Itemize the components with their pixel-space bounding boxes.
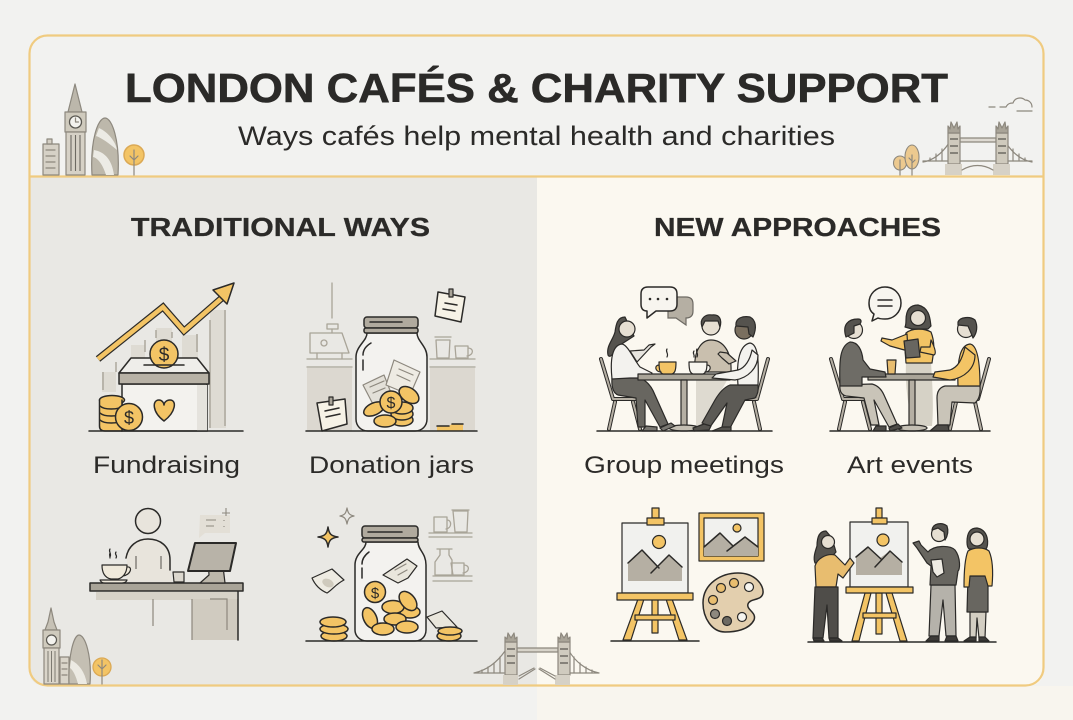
icon: fundraising box with rising arrow: $ [124, 408, 134, 428]
left chair [831, 359, 870, 429]
title: LONDON CAFÉS & CHARITY SUPPORT [125, 65, 948, 111]
label: fundraising: Fundraising [93, 452, 240, 479]
standing woman [906, 362, 933, 426]
icon: person at cafe desk [90, 508, 243, 640]
speech bubble [869, 287, 901, 321]
left man [840, 384, 897, 427]
heading: traditional ways: TRADITIONAL WAYS [131, 212, 430, 242]
right woman [967, 528, 988, 549]
back person [695, 340, 731, 372]
table and cups [638, 374, 730, 380]
icon: people viewing art on an easel [808, 508, 996, 642]
table and cup [868, 374, 955, 380]
left woman [814, 531, 836, 563]
right chair [729, 359, 768, 429]
left chair [601, 359, 640, 429]
right man [937, 386, 980, 425]
subtitle: Ways cafés help mental health and charities [238, 121, 835, 151]
middle man [929, 585, 956, 636]
icon: donation jar with coins and notes: $ [371, 585, 380, 602]
label: art events: Art events [847, 452, 973, 479]
icon: fundraising box with rising arrow: $ [159, 345, 170, 366]
icon: donation jar on cafe counter: $ [387, 395, 396, 412]
icon: bottom-left London skyline [43, 608, 111, 684]
icon: donation jar on cafe counter [306, 283, 477, 431]
icon: fundraising box with rising arrow [89, 283, 243, 431]
panel: new approaches [537, 176, 1044, 686]
right chair [950, 359, 989, 429]
icon: top-left London skyline [43, 84, 144, 175]
icon: easel, framed picture and palette [611, 508, 764, 641]
label: group meetings: Group meetings [584, 452, 784, 479]
icon: group meeting around a cafe table [597, 287, 772, 431]
speech bubbles [641, 287, 693, 325]
icon: bottom Tower Bridge [474, 633, 599, 685]
icon: top-right Tower Bridge, trees and cloud [894, 98, 1032, 175]
icon: donation jar with coins and notes [306, 508, 477, 641]
icon: discussion at a table [830, 287, 990, 431]
left woman [608, 317, 634, 356]
right man [702, 385, 758, 428]
panel: traditional ways [29, 176, 537, 686]
label: donation jars: Donation jars [309, 452, 474, 479]
heading: new approaches: NEW APPROACHES [654, 212, 941, 242]
